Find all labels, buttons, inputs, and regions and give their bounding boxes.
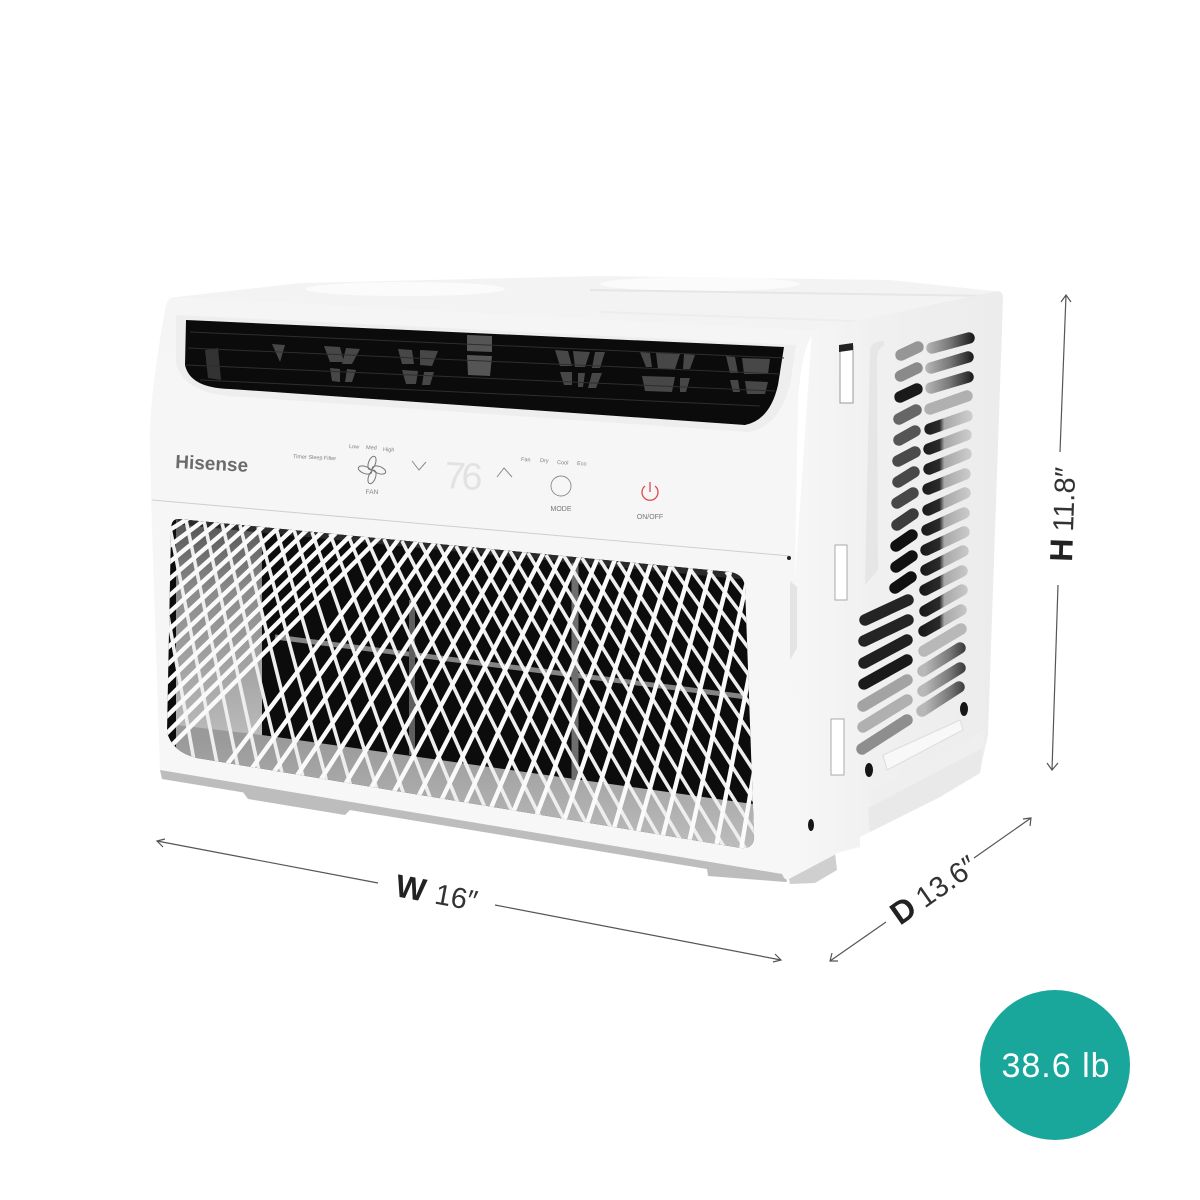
fan speed labels: Low xyxy=(349,444,359,451)
grille light left interior xyxy=(176,510,262,740)
on/off label: ON/OFF xyxy=(637,514,663,521)
height label: H11.8″ xyxy=(1043,466,1082,562)
carry handle xyxy=(883,720,963,770)
side vents xyxy=(862,338,969,749)
air conditioner unit xyxy=(150,276,1003,884)
grille lines: rising xyxy=(160,516,787,856)
width arrow right xyxy=(495,905,781,962)
louver bezel xyxy=(176,315,796,432)
vent column: short slats xyxy=(895,347,918,588)
mode label: MODE xyxy=(550,506,572,513)
height arrow lower xyxy=(1047,585,1058,770)
base strip xyxy=(160,770,786,882)
depth arrow lower xyxy=(830,922,886,961)
weight badge: 38.6 lb xyxy=(1001,1047,1111,1085)
depth label: D13.6″ xyxy=(883,847,983,932)
grille interior bars xyxy=(275,550,747,780)
vent column: right slats xyxy=(922,338,969,711)
brand logo: Hisense xyxy=(175,452,249,477)
top surface xyxy=(168,276,1003,331)
dimension: width xyxy=(157,839,781,962)
dimension: height xyxy=(1043,295,1082,770)
width arrow left xyxy=(157,839,378,883)
louver lines xyxy=(186,332,784,406)
mode eco: Eco xyxy=(577,461,587,467)
vent column: wide slats xyxy=(862,600,908,749)
icon: temperature up xyxy=(497,468,512,477)
icon: mode button xyxy=(551,476,571,496)
side channel xyxy=(865,341,884,585)
temperature display: 76 xyxy=(444,455,484,499)
side bolts xyxy=(808,702,968,831)
side slot xyxy=(790,581,797,660)
rear base steps xyxy=(868,730,985,832)
front grille xyxy=(167,519,754,848)
grille lines: falling xyxy=(169,520,754,848)
mode labels: Fan xyxy=(521,457,531,463)
timer labels: Timer Sleep Filter xyxy=(293,454,337,462)
icon: fan xyxy=(357,455,387,485)
fan speed high: High xyxy=(383,447,395,454)
base feet xyxy=(240,788,837,884)
louver xyxy=(185,320,784,425)
front face xyxy=(150,297,815,878)
side hinge clips xyxy=(831,343,853,775)
louver vents xyxy=(205,335,770,394)
mode dry: Dry xyxy=(540,458,549,464)
seam notch xyxy=(787,556,791,560)
mode cool: Cool xyxy=(557,460,569,467)
width label: W16″ xyxy=(393,867,481,918)
weight badge xyxy=(980,990,1130,1140)
depth arrow upper xyxy=(974,818,1031,858)
height arrow upper xyxy=(1060,295,1071,452)
icon: power xyxy=(642,482,658,500)
grille light lower interior xyxy=(176,725,760,860)
grille top shadow xyxy=(178,520,745,575)
icon: temperature down xyxy=(412,461,426,470)
control panel xyxy=(175,444,663,521)
fan label: FAN xyxy=(366,489,379,496)
side panel xyxy=(775,291,1003,880)
fan speed med: Med xyxy=(366,445,377,452)
panel seam xyxy=(152,500,790,556)
dimension: depth xyxy=(830,818,1031,961)
